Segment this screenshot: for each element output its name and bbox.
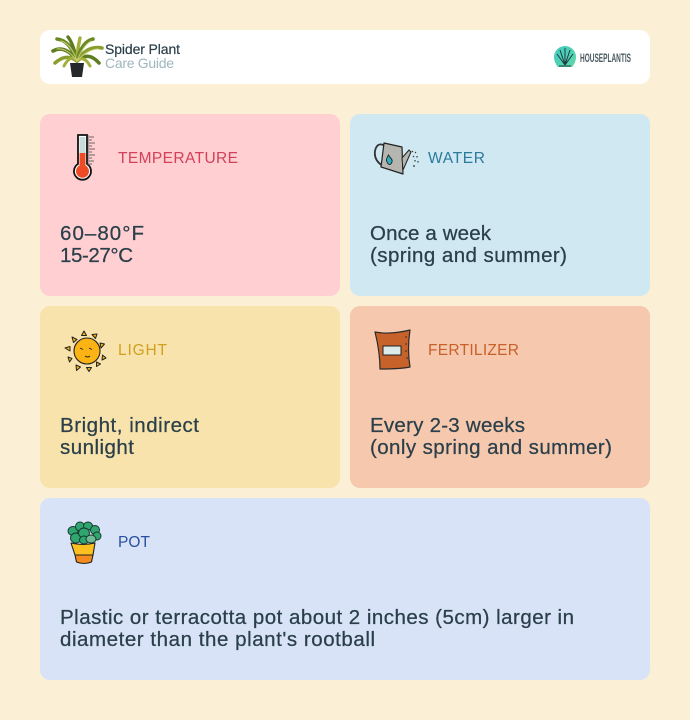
heading: FERTILIZER (428, 342, 519, 359)
panel: temperature (40, 114, 340, 296)
icon: watering can (375, 143, 418, 174)
icon: thermometer (74, 135, 95, 180)
body text: Bright, indirect (60, 414, 199, 437)
header title: Care Guide (105, 55, 174, 71)
body text: Every 2-3 weeks (370, 414, 525, 437)
panel: pot (40, 498, 650, 680)
icon: sun (65, 331, 106, 372)
header bar (40, 30, 650, 84)
header title: Spider Plant (105, 41, 180, 57)
body text: sunlight (60, 436, 134, 459)
icon: fertilizer bag (375, 330, 410, 369)
body text: Plastic or terracotta pot about 2 inches (5cm) larger in (60, 606, 574, 629)
heading: POT (118, 534, 151, 551)
panel: water (350, 114, 650, 296)
logo: Houseplantis: HOUSEPLANTIS (580, 53, 631, 65)
body text: (only spring and summer) (370, 436, 612, 459)
panel: light (40, 306, 340, 488)
body text (60, 606, 574, 651)
heading: WATER (428, 150, 485, 167)
header title (105, 41, 180, 71)
body text (60, 414, 199, 459)
heading: TEMPERATURE (118, 150, 238, 167)
panel: fertilizer (350, 306, 650, 488)
body text: 15-27°C (60, 244, 133, 267)
body text: (spring and summer) (370, 244, 567, 267)
body text: 60–80°F (60, 222, 144, 245)
heading: LIGHT (118, 342, 168, 359)
body text (370, 222, 567, 267)
body text: diameter than the plant's rootball (60, 628, 375, 651)
icon: potted plant (68, 522, 101, 564)
body text (60, 222, 144, 267)
icon: spider plant (53, 37, 102, 77)
logo: Houseplantis (554, 46, 631, 67)
body text: Once a week (370, 222, 492, 245)
body text (370, 414, 612, 459)
